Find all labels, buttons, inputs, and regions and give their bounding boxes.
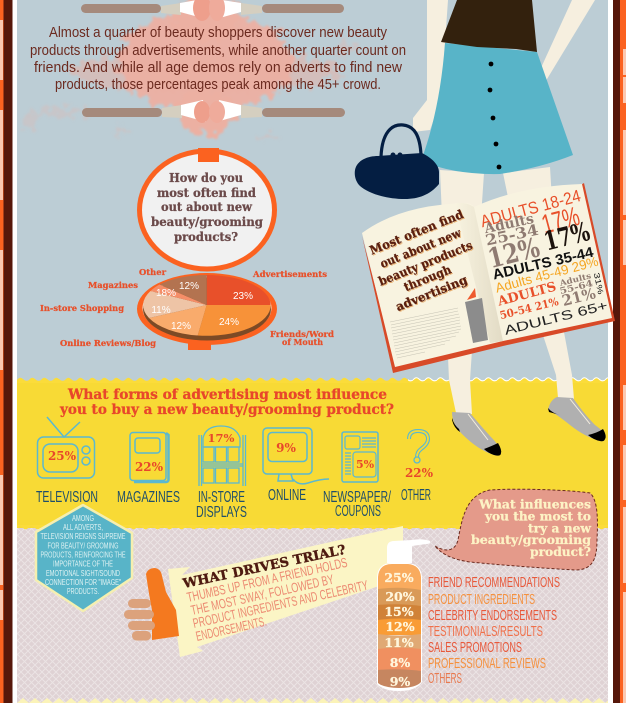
icon: bottom makeup brushes <box>82 100 345 123</box>
text: age group statistics: 50-54 21% <box>498 295 560 322</box>
icon: in-store display 17%: 17% <box>208 431 235 445</box>
panel: what drives trial banner <box>168 526 403 657</box>
compact mirror question: beauty/grooming <box>151 214 263 229</box>
text: magazine left page heading: out about new <box>379 226 465 272</box>
chart: lotion bottle stacked percentages: 9% <box>390 674 410 689</box>
legend: trial influences list: PRODUCT INGREDIENTS <box>428 592 535 608</box>
advertising category labels: COUPONS <box>335 503 381 520</box>
icon: computer monitor 9%: 9% <box>276 441 296 455</box>
advertising category labels: TELEVISION <box>36 489 98 506</box>
text: age group statistics: 31% <box>592 272 605 295</box>
icon: handbag <box>355 125 439 199</box>
text: age group statistics: 21% <box>560 284 597 310</box>
text: magazine left page heading: beauty products <box>378 239 476 290</box>
icon: question mark 22% <box>405 431 434 480</box>
panel: what drives trial banner: ENDORSEMENTS. <box>194 614 268 644</box>
icon: television 25% <box>38 417 94 478</box>
pie chart labels <box>40 268 334 349</box>
legend: trial influences list <box>428 575 560 687</box>
chart: lotion bottle stacked percentages: 15% <box>384 604 414 619</box>
icon: magazine 22%: 22% <box>135 460 164 474</box>
pie chart labels: of Mouth <box>282 338 323 348</box>
text: magazine left page heading: Most often find <box>368 207 466 258</box>
text: magazine left page heading: through <box>402 262 454 294</box>
text: magazine left page heading: beauty products <box>377 238 475 289</box>
pie chart labels: Advertisements <box>252 270 327 280</box>
pink powder splatter <box>23 0 354 140</box>
legend: trial influences list: SALES PROMOTIONS <box>428 640 522 656</box>
pie chart labels: Online Reviews/Blog <box>60 339 156 349</box>
text: age group statistics: 17% <box>538 201 583 240</box>
icon: in-store display 17% <box>199 426 246 486</box>
illustration: woman <box>413 0 606 456</box>
icon: question mark 22%: 22% <box>405 466 434 480</box>
panel: yellow advertising section <box>17 375 608 528</box>
advertising category labels: NEWSPAPER/ <box>323 489 391 506</box>
text: age group statistics: ADULTS 18-24 <box>478 186 583 231</box>
text: age group statistics: ADULTS <box>495 280 558 310</box>
legend: trial influences list: OTHERS <box>428 671 462 687</box>
chart: lotion bottle stacked percentages: 20% <box>385 589 415 604</box>
heading: advertising forms question <box>59 387 394 418</box>
callout: television hexagon: AMONG <box>72 514 94 523</box>
text: age group statistics: 55-64 <box>559 279 594 297</box>
text: age group statistics: Adults 45-49 29% <box>494 254 600 296</box>
pie chart labels: Friends/Word <box>270 330 334 340</box>
speech bubble: what influences: product? <box>530 545 591 559</box>
speech bubble: what influences: beauty/grooming <box>471 533 592 547</box>
advertising category labels: IN-STORE <box>198 489 245 506</box>
icon: thumbs up hand <box>124 568 179 640</box>
advertising category labels: DISPLAYS <box>196 504 247 521</box>
advertising category labels: MAGAZINES <box>117 489 180 506</box>
chart: lotion bottle stacked percentages <box>377 539 430 691</box>
speech bubble: what influences: you the most to <box>484 510 591 524</box>
pie chart in compact <box>137 273 277 350</box>
pie chart labels: Other <box>139 268 167 278</box>
icon: top makeup brushes <box>81 0 344 21</box>
text: magazine left page heading: Most often find <box>369 208 467 259</box>
text: magazine left page heading: advertising <box>395 273 471 315</box>
pie chart in compact: 11% <box>151 305 171 316</box>
intro text block: Almost a quarter of beauty shoppers discover new beauty <box>49 24 387 41</box>
pie chart in compact: 24% <box>219 317 239 328</box>
chart: lotion bottle stacked percentages: 8% <box>390 655 410 670</box>
panel: what drives trial banner: PRODUCT INGREDIENTS AND CELEBRITY <box>191 578 369 631</box>
intro text block <box>30 24 406 93</box>
icon: newspaper 5% <box>342 432 378 482</box>
pie chart labels: In-store Shopping <box>40 304 124 314</box>
speech bubble: what influences: What influences <box>478 498 591 512</box>
advertising category labels <box>36 487 431 521</box>
icon: computer monitor 9% <box>263 428 329 484</box>
panel: what drives trial banner: THUMBS UP FROM A FRIEND HOLDS <box>185 555 349 605</box>
callout: television hexagon: FOR BEAUTY/ GROOMING <box>48 542 118 550</box>
pie chart labels: Magazines <box>88 281 138 291</box>
compact mirror question: products? <box>174 229 238 244</box>
text: magazine left page heading: advertising <box>394 272 470 314</box>
text: magazine left page heading: through <box>403 263 455 295</box>
icon: magazine 22% <box>130 432 168 482</box>
text: magazine left page heading <box>368 207 476 315</box>
text: age group statistics: 25-34 <box>484 221 540 250</box>
legend: trial influences list: TESTIMONIALS/RESULTS <box>428 624 543 640</box>
text: age group statistics: 17% <box>541 217 593 257</box>
advertising category labels: OTHER <box>401 487 431 504</box>
panel: what drives trial banner: WHAT DRIVES TRIAL? <box>181 543 348 592</box>
advertising category labels: ONLINE <box>268 487 306 504</box>
chart: lotion bottle stacked percentages: 12% <box>385 619 415 634</box>
icon: lipstick <box>465 288 488 343</box>
callout: television hexagon: IMPORTANCE OF THE <box>53 560 113 568</box>
callout: television hexagon: EMOTIONAL SIGHT/SOUND <box>46 569 120 578</box>
compact mirror question <box>137 148 277 272</box>
icon: newspaper 5%: 5% <box>356 458 375 471</box>
chart: lotion bottle stacked percentages: 25% <box>384 570 414 585</box>
intro text block: friends. And while all age demos rely on adverts to find new <box>34 59 402 76</box>
pie chart in compact: 23% <box>233 291 253 302</box>
intro text block: products, those percentages peak among the 45+ crowd. <box>55 76 381 93</box>
text: age group statistics: ADULTS 35-44 <box>491 245 595 283</box>
chart: lotion bottle stacked percentages: 11% <box>384 635 414 650</box>
text: age group statistics: Adults <box>482 211 535 237</box>
text: age group statistics: ADULTS 65+ <box>503 298 609 338</box>
compact mirror question: out about new <box>161 199 253 214</box>
callout: television hexagon: PRODUCTS, REINFORCING THE <box>40 550 126 560</box>
heading: advertising forms question: you to buy a new beauty/grooming product? <box>59 402 394 418</box>
compact mirror question: most often find <box>157 185 256 200</box>
icon: television 25%: 25% <box>48 449 77 463</box>
pie chart in compact: 12% <box>171 321 191 332</box>
illustration: open magazine <box>362 183 615 373</box>
text: age group statistics: Adults <box>557 270 593 288</box>
callout: television hexagon: PRODUCTS. <box>67 587 99 596</box>
text: age group statistics: 12% <box>485 232 543 275</box>
callout: television hexagon: ALL ADVERTS, <box>63 523 103 532</box>
callout: television hexagon: TELEVISION REIGNS SUPREME <box>40 532 126 541</box>
pie chart in compact: 12% <box>179 281 199 292</box>
text: magazine fine print lines <box>390 308 461 358</box>
callout: television hexagon <box>36 505 132 611</box>
text: age group statistics <box>478 186 609 338</box>
speech bubble: what influences: try a new <box>528 522 592 536</box>
speech bubble: what influences <box>435 489 597 570</box>
text: magazine left page heading: out about new <box>378 225 464 271</box>
pie chart in compact: 18% <box>156 288 176 299</box>
panel: patterned trial section <box>17 525 608 703</box>
panel: what drives trial banner: THE MOST SWAY, FOLLOWED BY <box>189 572 335 618</box>
compact mirror question: How do you <box>169 170 243 185</box>
legend: trial influences list: PROFESSIONAL REVIEWS <box>428 656 546 672</box>
intro text block: products through advertisements, while another quarter count on <box>30 42 406 59</box>
heading: advertising forms question: What forms of advertising most influence <box>67 387 387 403</box>
callout: television hexagon: CONNECTION FOR "IMAGE" <box>45 578 121 587</box>
panel: blue background <box>17 0 608 382</box>
